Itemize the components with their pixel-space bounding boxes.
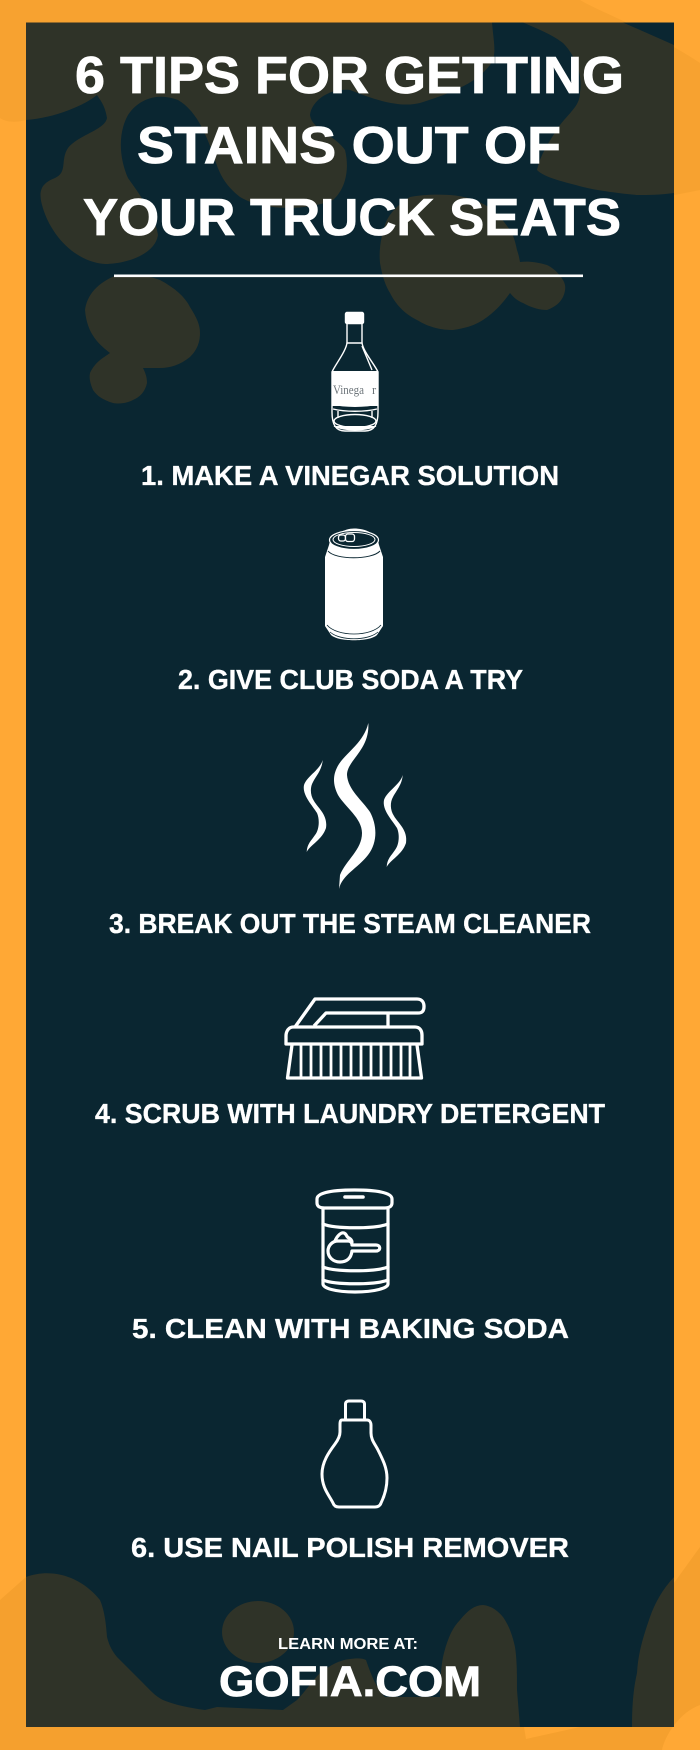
- label: step 1: 1. MAKE A VINEGAR SOLUTION: [141, 460, 559, 491]
- divider rule: [114, 274, 583, 277]
- title: YOUR TRUCK SEATS: [83, 189, 621, 247]
- title: [75, 47, 624, 247]
- label: step 4: 4. SCRUB WITH LAUNDRY DETERGENT: [95, 1098, 605, 1129]
- icon: steam: [304, 723, 406, 889]
- label: step 5: 5. CLEAN WITH BAKING SODA: [132, 1313, 569, 1344]
- icon: scrub brush: [286, 999, 424, 1078]
- label: step 2: 2. GIVE CLUB SODA A TRY: [178, 664, 523, 695]
- icon: baking soda tin: [317, 1190, 392, 1292]
- label: step 3: 3. BREAK OUT THE STEAM CLEANER: [109, 908, 591, 939]
- icon: vinegar bottle: r: [372, 383, 377, 397]
- label: step 6: 6. USE NAIL POLISH REMOVER: [131, 1532, 569, 1563]
- icon: nail polish remover bottle: [322, 1401, 387, 1507]
- icon: soda can: [325, 528, 383, 640]
- footer: website: GOFIA.COM: [219, 1658, 481, 1706]
- icon: vinegar bottle: Vinega: [333, 383, 364, 397]
- footer: learn more: LEARN MORE AT:: [278, 1636, 418, 1653]
- icon: vinegar bottle: [332, 312, 378, 431]
- title: 6 TIPS FOR GETTING: [75, 47, 624, 105]
- title: STAINS OUT OF: [137, 117, 561, 175]
